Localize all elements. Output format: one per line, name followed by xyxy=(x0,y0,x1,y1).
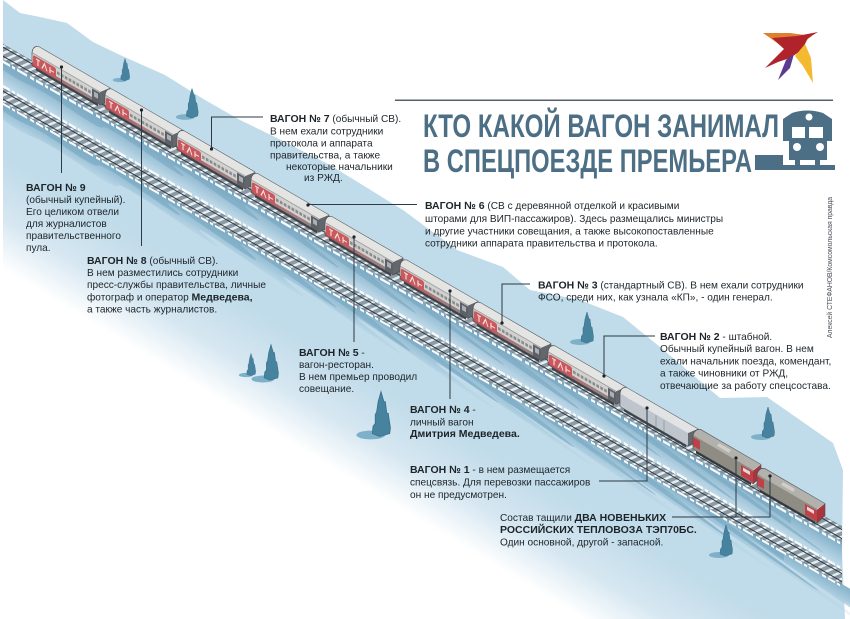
callout lines xyxy=(62,67,770,517)
text: car 8: ВАГОН № 8 (обычный СВ). xyxy=(87,255,218,267)
trees xyxy=(113,58,774,558)
tree 5 xyxy=(356,392,390,439)
car 7 xyxy=(177,127,255,197)
text: car 3: ВАГОН № 3 (стандартный СВ). В нем ехали сотрудники xyxy=(538,280,804,292)
text: car 1: спецсвязь. Для перевозки пассажиров xyxy=(410,478,590,488)
text: car 7: из РЖД. xyxy=(304,173,343,184)
callout dots xyxy=(60,65,772,478)
text: locomotives: Один основной, другой - запасной. xyxy=(500,538,663,548)
text: car 1: ВАГОН № 1 - в нем размещается xyxy=(410,464,570,476)
text: car 7: протокола и аппарата xyxy=(270,138,373,150)
text: car 1: он не предусмотрен. xyxy=(410,490,507,501)
text: car 9: Его целиком отвели xyxy=(26,207,119,218)
car 5 xyxy=(325,212,403,283)
text: car 8: В нем разместились сотрудники xyxy=(87,268,238,279)
tree 8 xyxy=(709,525,732,558)
car 4 xyxy=(400,256,478,327)
darker wave below upper track xyxy=(3,59,824,553)
text: car 8: фотограф и оператор Медведева, xyxy=(87,292,253,304)
car 1 xyxy=(620,384,698,454)
text: car 5: совещание. xyxy=(299,384,354,395)
text: car 2: отвечающие за работу спецсостава. xyxy=(660,380,831,392)
tree 4 xyxy=(251,344,278,382)
text: car 9: (обычный купейный). xyxy=(26,194,125,206)
text: car 2: ВАГОН № 2 - штабной. xyxy=(660,331,772,343)
text: car 4: Дмитрия Медведева. xyxy=(410,428,520,440)
upper track xyxy=(3,44,842,542)
text: car 4: ВАГОН № 4 - xyxy=(410,404,476,416)
car 3 xyxy=(473,298,551,369)
text: car 9: пула. xyxy=(26,243,51,254)
text: car 6: сотрудники аппарата правительства и протокола. xyxy=(425,238,658,250)
text: car 5: В нем премьер проводил xyxy=(299,372,417,383)
text: car 5: вагон-ресторан. xyxy=(299,360,374,371)
tree 3 xyxy=(239,353,256,377)
text: car 2: а также чиновники от РЖД, xyxy=(660,368,788,380)
tree 1 xyxy=(113,58,130,82)
tree 2 xyxy=(176,88,198,120)
lower track xyxy=(3,88,842,585)
train xyxy=(32,43,825,530)
text: locomotives: Состав тащили ДВА НОВЕНЬКИХ xyxy=(500,512,666,524)
car 9 xyxy=(32,43,110,113)
text: car 2: ехали начальник поезда, комендант, xyxy=(660,356,831,368)
text: car 8: пресс-службы правительства, личные xyxy=(87,279,266,291)
text: car 3: ФСО, среди них, как узнала «КП», - один генерал. xyxy=(538,292,773,304)
logo: bird xyxy=(763,32,818,83)
text: car 7: правительства, а также xyxy=(270,150,380,162)
text: car 6: шторами для ВИП-пассажиров). Здесь размещались министры xyxy=(425,214,723,225)
darker wave below second track xyxy=(3,100,818,591)
header rule xyxy=(395,100,833,101)
icon: train at platform xyxy=(755,110,835,170)
text: car 7: некоторые начальники xyxy=(286,162,393,173)
text: car 2: Обычный купейный вагон. В нем xyxy=(660,343,814,355)
car 2 xyxy=(548,342,626,413)
locomotive 2 xyxy=(757,464,825,530)
car 8 xyxy=(105,85,183,156)
text: car 5: ВАГОН № 5 - xyxy=(299,347,365,359)
title xyxy=(423,108,779,179)
text: car 6: и другие участники совещания, а также высокопоставленные xyxy=(425,226,714,238)
car 6 xyxy=(251,170,329,240)
tree 7 xyxy=(751,407,774,440)
text: car 8: а также часть журналистов. xyxy=(87,304,217,316)
tree 6 xyxy=(570,312,594,345)
text: car 6: ВАГОН № 6 (СВ с деревянной отделкой и красивыми xyxy=(425,200,679,212)
text: car 7: ВАГОН № 7 (обычный СВ). xyxy=(270,113,401,125)
text: locomotives: РОССИЙСКИХ ТЕПЛОВОЗА ТЭП70БС. xyxy=(500,523,697,536)
text: car 9: ВАГОН № 9 xyxy=(26,182,86,194)
text: car 4: личный вагон xyxy=(410,418,474,428)
credit: Алексей СТЕФАНОВ/Комсомольская правда xyxy=(826,197,834,338)
text: car 7: В нем ехали сотрудники xyxy=(270,126,383,138)
text: car 9: для журналистов xyxy=(26,219,107,230)
text: car 9: правительственного xyxy=(26,231,121,242)
locomotive 1 xyxy=(693,425,761,491)
